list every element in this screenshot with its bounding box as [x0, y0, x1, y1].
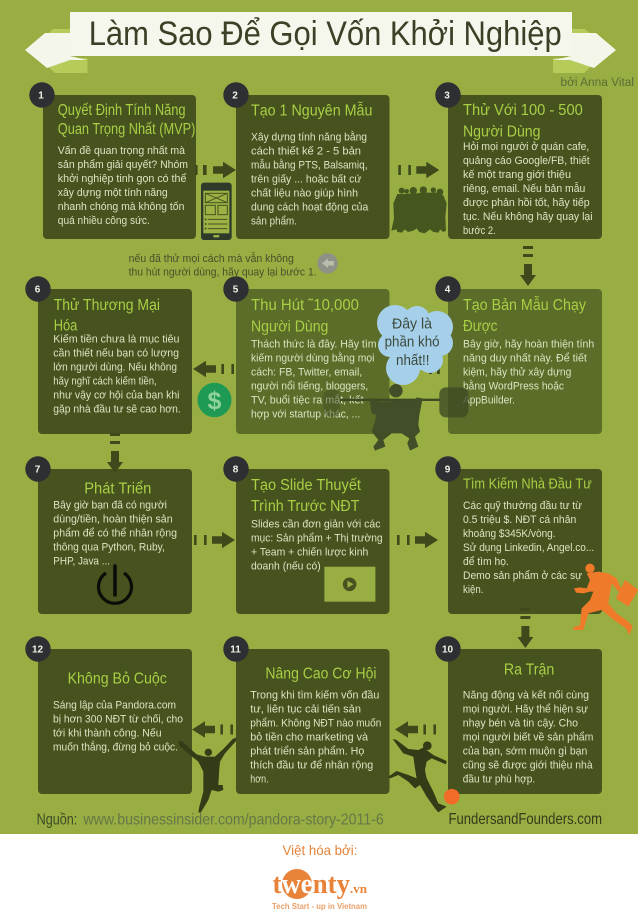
step 2 body: Xây dựng tính năng bằng — [251, 131, 367, 144]
step 6 badge: 6 — [35, 284, 41, 296]
arrow 9 to 10 — [517, 608, 533, 648]
step 3 body: kế một trang giới thiệu — [463, 169, 571, 181]
step 12 body — [53, 699, 183, 753]
step 6 heading — [54, 297, 160, 335]
step 6 body: gặp nhà đầu tư sẽ cao hơn. — [53, 403, 181, 415]
author credit: bởi Anna Vital — [560, 77, 634, 89]
step 11 badge: 11 — [230, 644, 241, 656]
step 9 body: Các quỹ thường đầu tư từ — [463, 500, 583, 512]
step 5 body — [251, 338, 376, 420]
step 8 heading: Trình Trước NĐT — [251, 498, 360, 515]
step 11 panel — [223, 636, 390, 794]
step 10 body — [463, 689, 593, 785]
icon: dollar coin — [198, 383, 232, 417]
step 1 body — [58, 145, 188, 227]
arrow 7 to 8 — [194, 532, 235, 548]
icon: back arrow circle — [317, 253, 338, 274]
icon: crowd of people — [391, 186, 447, 233]
step 4 badge: 4 — [445, 284, 451, 296]
step 1 badge: 1 — [38, 90, 44, 102]
icon: orange ball — [444, 789, 460, 804]
step 7 body: Bây giờ bạn đã có người — [53, 499, 167, 511]
step 3 body: tục. Nếu không hãy quay lại — [463, 211, 593, 223]
step 4 body: kiệm, hãy thử xây dựng — [463, 367, 571, 379]
source line: www.businessinsider.com/pandora-story-2011-6 — [83, 811, 384, 828]
step 6 heading: Thử Thương Mại — [54, 297, 160, 314]
step 1 badge — [29, 82, 55, 108]
step 3 body: quảng cáo Google/FB, thiết — [463, 155, 590, 167]
step 4 body: AppBuilder. — [463, 395, 515, 407]
step 6 panel — [25, 276, 192, 434]
step 2 heading: Tạo 1 Nguyên Mẫu — [251, 103, 372, 120]
step 10 body: mọi người biết về sản phẩm — [463, 731, 593, 743]
step 7 badge — [25, 456, 51, 482]
step 3 body — [463, 141, 593, 237]
step 10 panel — [435, 636, 602, 794]
cloud text: phần khó — [385, 335, 440, 351]
step 12 body: bị hơn 300 NĐT từ chối, cho — [53, 713, 183, 725]
step 10 body: nhạy bén và tin cậy. Cho — [463, 717, 578, 729]
step 3 badge: 3 — [444, 90, 450, 102]
step 7 body: phẩm để có thể nhân rộng — [53, 527, 177, 539]
step 8 badge — [223, 456, 249, 482]
step 4 panel — [435, 276, 602, 434]
arrow 5 to 6 — [193, 361, 234, 377]
step 9 body: 0.5 triệu $. NĐT cá nhân — [463, 514, 576, 526]
step 5 body: người nổi tiếng, bloggers, — [251, 380, 368, 392]
step 9 badge: 9 — [445, 464, 451, 476]
step 11 body: thích đầu tư để nhân rộng — [250, 759, 373, 771]
note: go back to step 1: nếu đã thử mọi cách mà vẫn không — [129, 252, 294, 265]
step 5 badge: 5 — [233, 284, 239, 296]
site credit: FundersandFounders.com — [448, 811, 602, 828]
icon: weightlifter — [323, 384, 468, 451]
step 6 body — [53, 333, 181, 415]
step 10 body: cũng sẽ được giới thiệu nhà — [463, 759, 593, 771]
step 4 heading: Được — [463, 318, 498, 335]
step 5 body: TV, buổi tiệc ra mắt, kết — [251, 393, 364, 406]
step 4 body: bằng WordPress hoặc — [463, 380, 564, 393]
step 6 body: Kiếm tiền chưa là mục tiêu — [53, 333, 179, 345]
step 4 body — [463, 339, 594, 407]
step 2 body: sản phẩm. — [251, 216, 297, 228]
arrow 8 to 9 — [397, 532, 438, 548]
arrow 6 to 7 — [107, 433, 123, 473]
step 7 body: PHP, Java ... — [53, 555, 110, 567]
step 10 badge: 10 — [442, 644, 453, 656]
step 2 body: dung cách hoạt động của — [251, 202, 369, 214]
step 12 badge: 12 — [32, 644, 43, 656]
step 7 body: dùng/tiền, hoàn thiện sản — [53, 513, 173, 525]
step 9 body: khoảng $345K/vòng. — [463, 528, 556, 540]
step 8 body: Slides cần đơn giản với các — [251, 518, 381, 530]
note: go back to step 1 — [129, 252, 317, 279]
step 9 badge — [435, 456, 461, 482]
step 2 body — [251, 131, 369, 228]
step 10 body: mọi người. Hãy thể hiện sự — [463, 703, 589, 715]
step 11 body: tư, liên tục cải tiến sản — [250, 703, 361, 715]
step 10 body: Năng động và kết nối cùng — [463, 689, 589, 701]
step 6 body: lớn người dùng. Nếu không — [53, 361, 177, 373]
step 11 heading: Nâng Cao Cơ Hội — [265, 665, 376, 682]
step 9 body: Sử dụng Linkedin, Angel.co... — [463, 542, 594, 554]
step 3 panel — [435, 82, 602, 239]
step 5 heading: Thu Hút ˜10,000 — [251, 297, 359, 314]
step 8 body — [251, 518, 383, 572]
step 5 heading: Người Dùng — [251, 319, 328, 336]
step 5 body: hợp với startup khác, ... — [251, 408, 360, 420]
step 2 badge: 2 — [232, 90, 238, 102]
step 4 badge — [435, 276, 461, 302]
logo: twenty.vn — [272, 868, 368, 911]
step 9 body — [463, 500, 594, 596]
step 9 heading: Tìm Kiếm Nhà Đầu Tư — [463, 475, 592, 492]
step 5 body: kiếm người dùng bằng mọi — [251, 351, 374, 364]
icon: power button — [99, 566, 132, 603]
step 7 heading: Phát Triển — [84, 480, 151, 497]
step 10 body: của bạn, sớm muộn gì bạn — [463, 745, 587, 757]
step 5 panel — [223, 276, 390, 434]
step 8 body: + Team + chiến lược kinh — [251, 546, 368, 558]
cloud text: Đây là — [392, 316, 433, 332]
step 12 heading: Không Bỏ Cuộc — [68, 670, 167, 687]
title ribbon — [25, 12, 616, 73]
icon: phone wireframe — [201, 183, 232, 240]
arrow 10 to 11 — [395, 721, 436, 738]
step 7 panel — [25, 456, 192, 614]
step 2 body: mẫu bằng PTS, Balsamiq, — [251, 159, 368, 172]
logo tagline: Tech Start - up in Vietnam — [272, 901, 367, 911]
step 3 heading: Người Dùng — [463, 124, 540, 141]
white footer background — [0, 834, 638, 922]
step 5 badge — [223, 276, 249, 302]
step 2 body: trên giấy ... hoặc bất cứ — [251, 174, 362, 186]
step 2 panel — [223, 82, 390, 239]
step 1 heading — [58, 102, 195, 138]
step 9 body: Demo sản phẩm ở các sự — [463, 570, 583, 582]
step 3 body: được phản hồi tốt, hãy tiếp — [463, 197, 590, 209]
step 4 heading: Tạo Bản Mẫu Chạy — [463, 297, 586, 314]
step 1 body: nhanh chóng mà không tốn — [58, 201, 184, 213]
step 10 badge — [435, 636, 461, 662]
translator credit: Việt hóa bởi: — [282, 842, 357, 858]
step 3 badge — [435, 82, 461, 108]
step 6 body: cần thiết nếu bạn có lượng — [53, 347, 179, 359]
step 7 body — [53, 499, 177, 567]
step 1 heading: Quyết Định Tính Năng — [58, 102, 186, 119]
icon: jumping silhouette right — [388, 739, 447, 812]
step 10 heading: Ra Trận — [504, 661, 554, 678]
arrow 11 to 12 — [192, 721, 233, 738]
step 12 body: muốn thắng, đừng bỏ cuộc. — [53, 740, 178, 753]
logo: twenty.vn: twenty — [272, 868, 350, 900]
step 8 body: mục: Sản phẩm + Thị trường — [251, 532, 383, 544]
step 5 body: Thách thức là đây. Hãy tìm — [251, 338, 376, 350]
step 1 body: khởi nghiệp tinh gọn có thể — [58, 173, 186, 185]
step 12 body: tới khi thành công. Nếu — [53, 727, 162, 739]
step 5 heading — [251, 297, 359, 336]
step 4 body: năng duy nhất này. Để tiết — [463, 353, 587, 365]
icon: running businessman — [573, 564, 638, 635]
step 11 badge — [223, 636, 249, 662]
step 3 heading: Thử Với 100 - 500 — [463, 102, 583, 119]
icon: video slide — [324, 567, 375, 602]
step 1 body: sản phẩm giải quyết? Nhóm — [58, 159, 188, 171]
note: go back to step 1: thu hút người dùng, hãy quay lại bước 1. — [129, 267, 317, 279]
step 5 body: cách: FB, Twitter, email, — [251, 366, 362, 378]
title: Làm Sao Để Gọi Vốn Khởi Nghiệp — [89, 15, 562, 53]
step 3 body: riêng, email. Nếu bản mẫu — [463, 182, 585, 195]
arrow 3 to 4 — [520, 246, 536, 286]
arrow 2 to 3 — [398, 162, 439, 178]
lifter head — [389, 384, 403, 397]
step 6 badge — [25, 276, 51, 302]
speech cloud — [377, 305, 453, 385]
step 6 body: hãy nghĩ cách kiếm tiền, — [53, 375, 157, 387]
step 9 body: kiện. — [463, 584, 484, 596]
step 6 body: như vậy cơ hội của bạn khi — [53, 389, 179, 401]
step 11 body: hơn. — [250, 773, 269, 785]
step 8 body: doanh (nếu có) — [251, 560, 321, 572]
step 1 body: quá nhiều công sức. — [58, 215, 150, 227]
source line: Nguồn: — [37, 811, 77, 828]
step 4 heading — [463, 297, 586, 335]
step 2 badge — [223, 82, 249, 108]
step 9 body: để tìm họ. — [463, 556, 509, 568]
step 2 body: cách thiết kế 2 - 5 bản — [251, 146, 361, 158]
step 12 badge — [25, 636, 51, 662]
step 3 heading — [463, 102, 583, 141]
step 3 body: Hỏi mọi người ở quán cafe, — [463, 141, 589, 153]
barbell — [323, 387, 468, 417]
step 12 body: Sáng lập của Pandora.com — [53, 699, 176, 711]
step 7 body: thông qua Python, Ruby, — [53, 541, 165, 553]
step 1 heading: Quan Trọng Nhất (MVP) — [58, 121, 195, 138]
step 8 heading: Tạo Slide Thuyết — [251, 477, 362, 494]
lifter body — [369, 397, 423, 451]
cloud text: nhất!! — [396, 353, 430, 369]
step 11 body: bỏ tiền cho marketing và — [250, 731, 369, 743]
logo: twenty.vn: .vn — [350, 881, 368, 896]
icon: dollar coin: $ — [208, 387, 222, 415]
step 1 panel — [29, 82, 196, 239]
step 10 body: đầu tư phù hợp. — [463, 773, 535, 785]
step 11 body: phát triển sản phẩm. Họ — [250, 745, 364, 757]
step 4 body: Bây giờ, hãy hoàn thiện tính — [463, 339, 594, 351]
step 8 panel — [223, 456, 390, 614]
step 1 body: Vấn đề quan trọng nhất mà — [58, 145, 186, 157]
arrow 4 to 5 stub — [429, 364, 440, 374]
cloud text — [385, 316, 440, 369]
step 1 body: xây dựng một tính năng — [58, 187, 168, 199]
step 9 panel — [435, 456, 602, 614]
step 8 heading — [251, 477, 362, 515]
step 12 panel — [25, 636, 192, 794]
step 7 badge: 7 — [35, 464, 41, 476]
step 11 body: Trong khi tìm kiếm vốn đầu — [250, 689, 379, 701]
step 11 body: phẩm. Không NĐT nào muốn — [250, 717, 381, 729]
step 11 body — [250, 689, 381, 785]
step 8 badge: 8 — [233, 464, 239, 476]
step 6 heading: Hóa — [54, 318, 78, 335]
step 3 body: bước 2. — [463, 225, 496, 237]
step 2 body: chất liệu nào giúp hình — [251, 188, 358, 200]
arrow 1 to 2 — [195, 162, 236, 178]
icon: jumping silhouette left — [178, 738, 236, 813]
